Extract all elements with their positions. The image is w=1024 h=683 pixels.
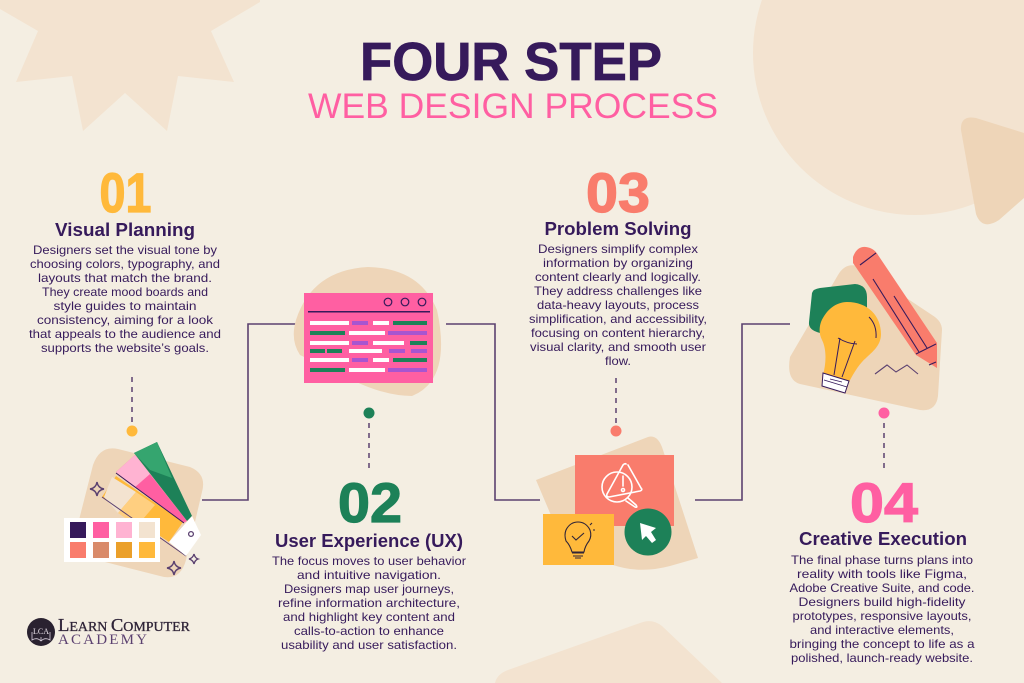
title: WEB DESIGN PROCESS: [308, 87, 718, 126]
step 02 text: User Experience (UX): [275, 531, 463, 551]
connector lines: [202, 324, 790, 500]
icon: lightbulb and pencil: [789, 247, 942, 410]
step 03 text: Designers simplify complex: [538, 242, 698, 256]
step 04 text: Designers build high-fidelity: [798, 595, 966, 609]
step 03 text: simplification, and accessibility,: [529, 312, 707, 326]
title: FOUR STEP: [360, 32, 662, 92]
step 03 text: content clearly and logically.: [535, 270, 701, 284]
step 04 text: Creative Execution: [799, 529, 967, 549]
step 02 text: refine information architecture,: [278, 596, 460, 610]
step 02 text: Designers map user journeys,: [284, 582, 454, 596]
step 02 text: and highlight key content and: [283, 610, 455, 624]
step 04 text: polished, launch-ready website.: [791, 651, 973, 665]
step 01 text: Visual Planning: [55, 220, 195, 240]
step 04 text: 04: [850, 471, 918, 534]
icon: website window: [294, 267, 441, 396]
step 03 text: 03: [586, 161, 650, 224]
step 04 text: [790, 471, 975, 665]
icon: colour swatch fan: [64, 442, 203, 577]
step 01 dashed connector: [126, 377, 138, 436]
step 03 text: information by organizing: [543, 256, 693, 270]
step 03 dashed connector: [610, 378, 622, 436]
step 01 text: [29, 161, 221, 355]
step 04 text: reality with tools like Figma,: [797, 567, 967, 581]
step 04 text: prototypes, responsive layouts,: [792, 609, 972, 623]
step 01 text: layouts that match the brand.: [38, 271, 212, 285]
step 01 text: 01: [100, 161, 152, 224]
step 02 text: 02: [338, 471, 402, 534]
step 01 text: Designers set the visual tone by: [33, 243, 217, 257]
step 01 text: consistency, aiming for a look: [37, 313, 214, 327]
step 02 text: and intuitive navigation.: [297, 568, 441, 582]
background circle: [753, 0, 1024, 215]
step 04 text: The final phase turns plans into: [791, 553, 973, 567]
step 01 text: style guides to maintain: [54, 299, 196, 313]
background rounded triangle: [961, 118, 1024, 224]
step 03 text: They address challenges like: [534, 284, 702, 298]
step 04 text: and interactive elements,: [810, 623, 954, 637]
background sun shape: [0, 0, 260, 131]
title: [308, 32, 718, 126]
step 04 dashed connector: [878, 408, 890, 472]
logo: Learn Computer Academy: LEARN COMPUTER: [58, 615, 190, 635]
step 01 text: choosing colors, typography, and: [30, 257, 220, 271]
step 03 text: data-heavy layouts, process: [537, 298, 699, 312]
step 01 text: that appeals to the audience and: [29, 327, 221, 341]
step 02 text: The focus moves to user behavior: [272, 554, 466, 568]
logo: Learn Computer Academy: LCA: [33, 627, 49, 636]
step 04 text: Adobe Creative Suite, and code.: [790, 581, 974, 595]
icon: problem solving cards: [536, 437, 698, 570]
step 02 dashed connector: [364, 408, 374, 472]
background bottom shape: [495, 621, 722, 683]
step 03 text: focusing on content hierarchy,: [531, 326, 705, 340]
step 02 text: calls-to-action to enhance: [294, 624, 444, 638]
logo: Learn Computer Academy: [27, 615, 190, 648]
step 03 text: Problem Solving: [544, 219, 692, 239]
step 04 text: bringing the concept to life as a: [790, 637, 975, 651]
step 03 text: [529, 161, 707, 368]
step 02 text: [272, 471, 466, 652]
logo: Learn Computer Academy: ACADEMY: [58, 632, 147, 648]
step 03 text: visual clarity, and smooth user: [530, 340, 706, 354]
step 02 text: usability and user satisfaction.: [281, 638, 457, 652]
step 03 text: flow.: [605, 354, 631, 368]
step 01 text: supports the website’s goals.: [41, 341, 209, 355]
step 01 text: They create mood boards and: [42, 285, 208, 299]
